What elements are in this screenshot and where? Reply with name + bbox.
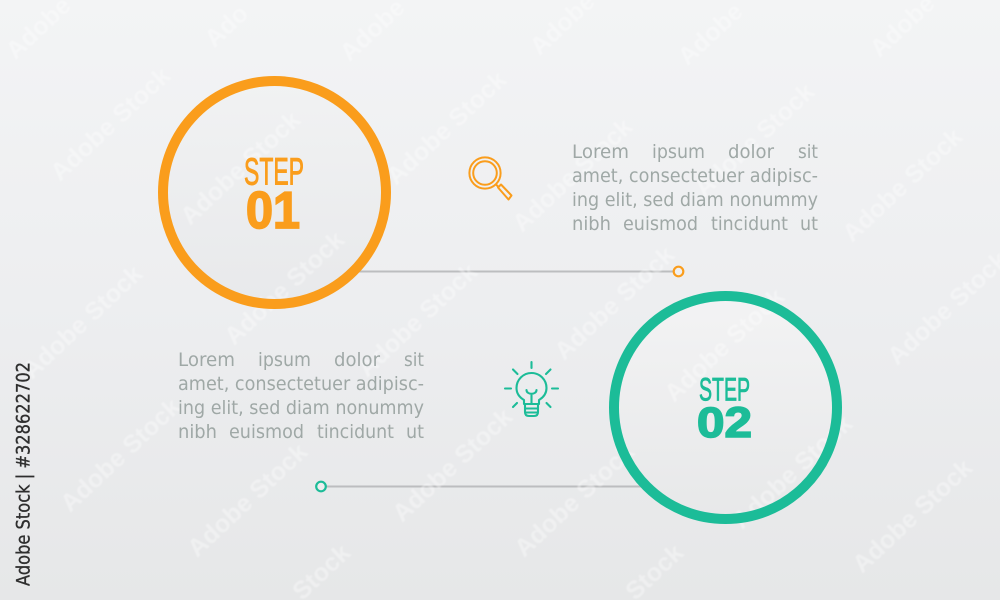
watermarks: Adobe Stock <box>17 260 148 384</box>
watermarks: Adobe Stock <box>45 62 176 186</box>
circle fill: step 2 <box>614 296 838 520</box>
step 2 number: 02 <box>697 399 752 447</box>
watermarks: Adobe Stock <box>182 438 313 562</box>
watermarks: Adobe Stock <box>219 226 350 350</box>
connector line: step 1 <box>355 270 674 272</box>
text block: step 1: ing elit, sed diam nonummy <box>572 189 818 211</box>
text block: step 1: euismod <box>623 213 698 235</box>
text block: step 2: ing elit, sed diam nonummy <box>178 397 424 419</box>
text block: step 1: Lorem <box>572 141 629 163</box>
text block: step 1: ipsum <box>652 141 705 163</box>
watermarks: Adobe Stock <box>55 393 186 517</box>
watermarks: Adobe Stock <box>507 113 638 237</box>
watermarks: Adobe Stock <box>381 66 512 190</box>
watermarks: Ado <box>199 0 254 53</box>
text block: step 2: tincidunt <box>317 421 394 443</box>
step 2 label: STEP <box>699 372 750 408</box>
text block: step 2: Lorem <box>178 349 235 371</box>
step 1 number: 01 <box>246 182 300 240</box>
text block: step 2: ipsum <box>258 349 311 371</box>
text block: step 1: sit <box>798 141 818 163</box>
watermarks: Adobe Stock <box>549 241 680 365</box>
watermarks: Adobe Stock <box>175 106 306 230</box>
step 2 label <box>697 372 752 447</box>
watermarks: Adobe Stock <box>837 123 968 247</box>
watermarks: Adobe Stock <box>509 438 640 562</box>
end dot: step 2 <box>316 482 326 491</box>
text block: step 1: amet, consectetuer adipisc- <box>572 165 818 187</box>
watermarks: Adobe Stock <box>387 403 518 527</box>
text block: step 1: tincidunt <box>711 213 788 235</box>
watermarks: Adobe Stock <box>659 283 790 407</box>
text block: step 2: ut <box>406 421 424 443</box>
circle ring: step 1 <box>163 81 386 304</box>
step 1 label: STEP <box>244 152 304 194</box>
text block: step 1: ut <box>800 213 818 235</box>
end dot: step 1 <box>674 267 683 276</box>
watermarks: Adobe Stock <box>352 258 483 382</box>
text block: step 2: dolor <box>334 349 380 371</box>
icon: magnifying glass <box>469 157 512 200</box>
watermarks: Adobe Stock <box>847 454 978 578</box>
step 1 label <box>244 152 304 240</box>
text block: step 1: dolor <box>728 141 774 163</box>
text block: step 2: nibh <box>178 421 217 443</box>
watermarks: Adobe Stock <box>727 410 858 534</box>
text block: step 2 <box>178 349 424 443</box>
connector line: step 2 <box>326 486 645 488</box>
text block: step 2: sit <box>404 349 424 371</box>
circle fill: step 1 <box>162 80 386 304</box>
text block: step 1 <box>572 141 818 235</box>
text block: step 2: amet, consectetuer adipisc- <box>178 373 424 395</box>
stock id label: Adobe Stock | #328622702 <box>12 362 34 586</box>
icon: light bulb <box>505 362 558 416</box>
circle ring: step 2 <box>614 296 837 519</box>
text block: step 2: euismod <box>229 421 304 443</box>
watermarks: Adobe Stock <box>689 78 820 202</box>
text block: step 1: nibh <box>572 213 611 235</box>
